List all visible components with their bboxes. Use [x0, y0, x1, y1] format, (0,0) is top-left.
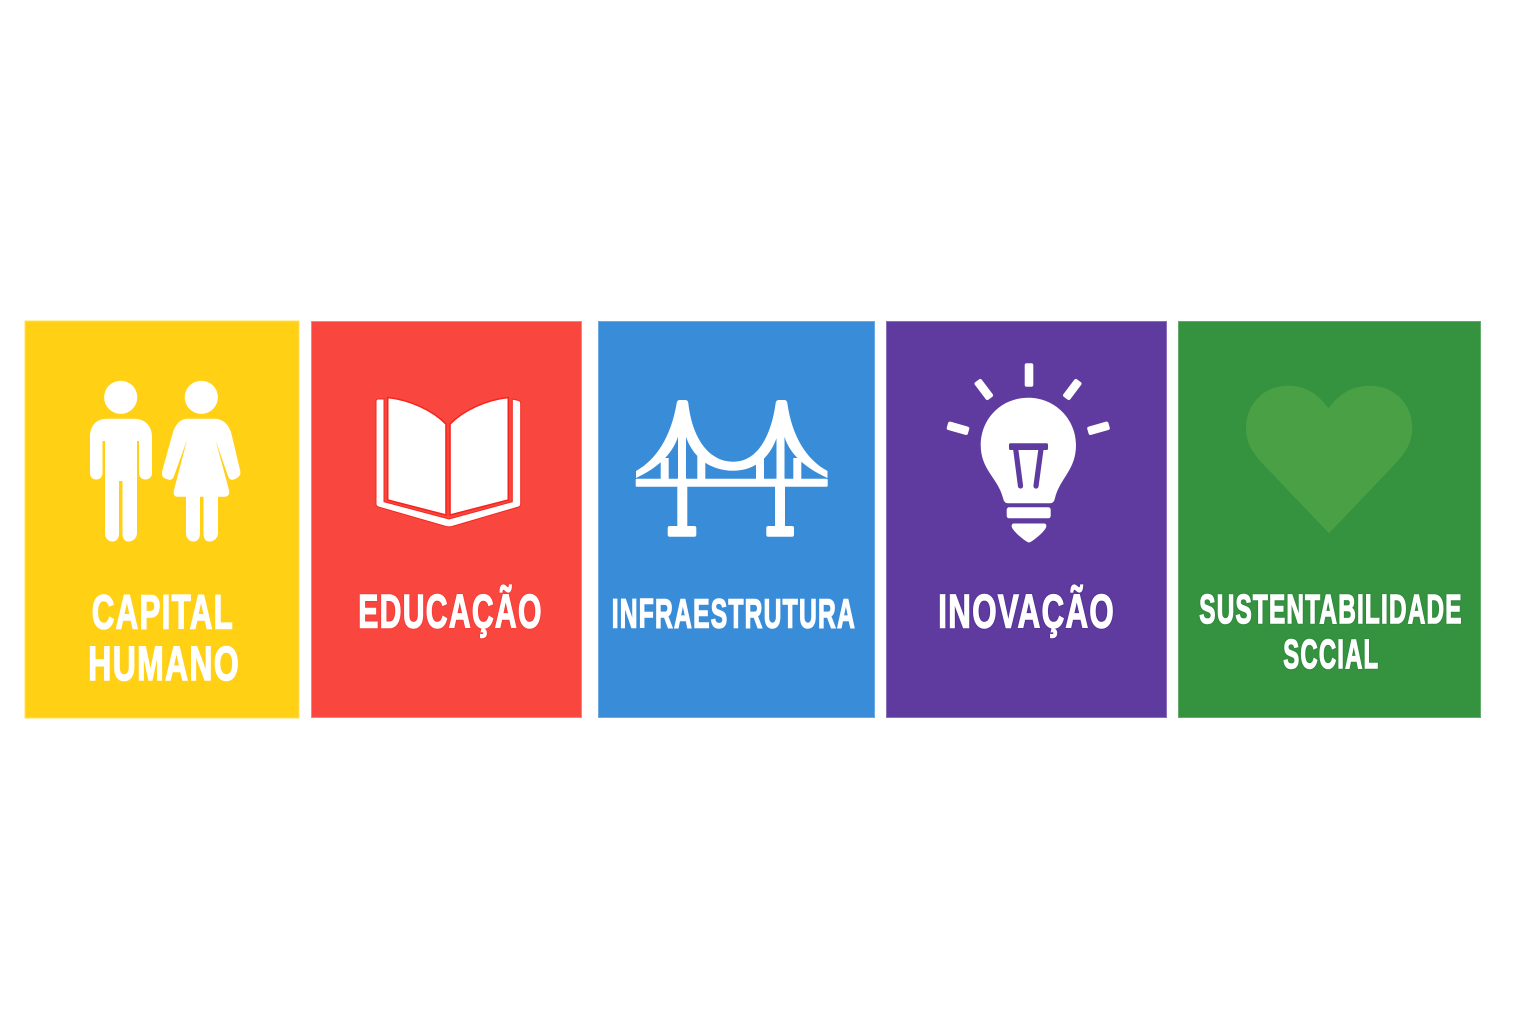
bridge deck: [636, 479, 828, 487]
heading: capital humano: [88, 586, 240, 691]
panel: sustentabilidade social: [1178, 322, 1480, 718]
icon: suspension bridge: [636, 400, 828, 537]
icon: woman: [162, 381, 240, 542]
right page: [450, 398, 508, 515]
icon: heart: [1246, 386, 1412, 533]
left page: [388, 398, 446, 515]
hangers: [661, 458, 669, 480]
heading: capital humano: HUMANO: [88, 638, 240, 691]
light rays: [946, 363, 1110, 435]
icon: light bulb: [946, 363, 1110, 542]
heading: educação: EDUCAÇÃO: [358, 584, 543, 637]
heading: inovação: INOVAÇÃO: [938, 584, 1115, 638]
heading: sustentabilidade sccial: [1199, 586, 1463, 677]
panel background: green: [1178, 322, 1480, 718]
panel background: purple: [886, 322, 1166, 718]
bulb base: [1007, 507, 1051, 518]
bulb glass: [981, 398, 1076, 503]
bulb tip: [1012, 524, 1046, 542]
icon: man: [90, 381, 152, 542]
panel: inovação: [886, 322, 1166, 718]
panel: capital humano: [25, 321, 299, 718]
left tower: [668, 430, 696, 537]
icon: man and woman: [90, 381, 240, 542]
filament: [1009, 443, 1048, 486]
panel background: blue: [598, 322, 874, 718]
heading: sustentabilidade sccial: SCCIAL: [1283, 631, 1379, 677]
panel: infraestrutura: [598, 322, 874, 718]
heading: capital humano: CAPITAL: [92, 586, 234, 639]
heading: infraestrutura: INFRAESTRUTURA: [612, 590, 856, 636]
panel background: red: [312, 322, 582, 718]
book cover: [376, 399, 521, 527]
panel: educação: [312, 322, 582, 718]
panel background: yellow: [25, 321, 299, 718]
bridge cables and towers tops: [636, 400, 828, 478]
icon: open book: [376, 398, 521, 527]
right tower: [766, 430, 794, 537]
